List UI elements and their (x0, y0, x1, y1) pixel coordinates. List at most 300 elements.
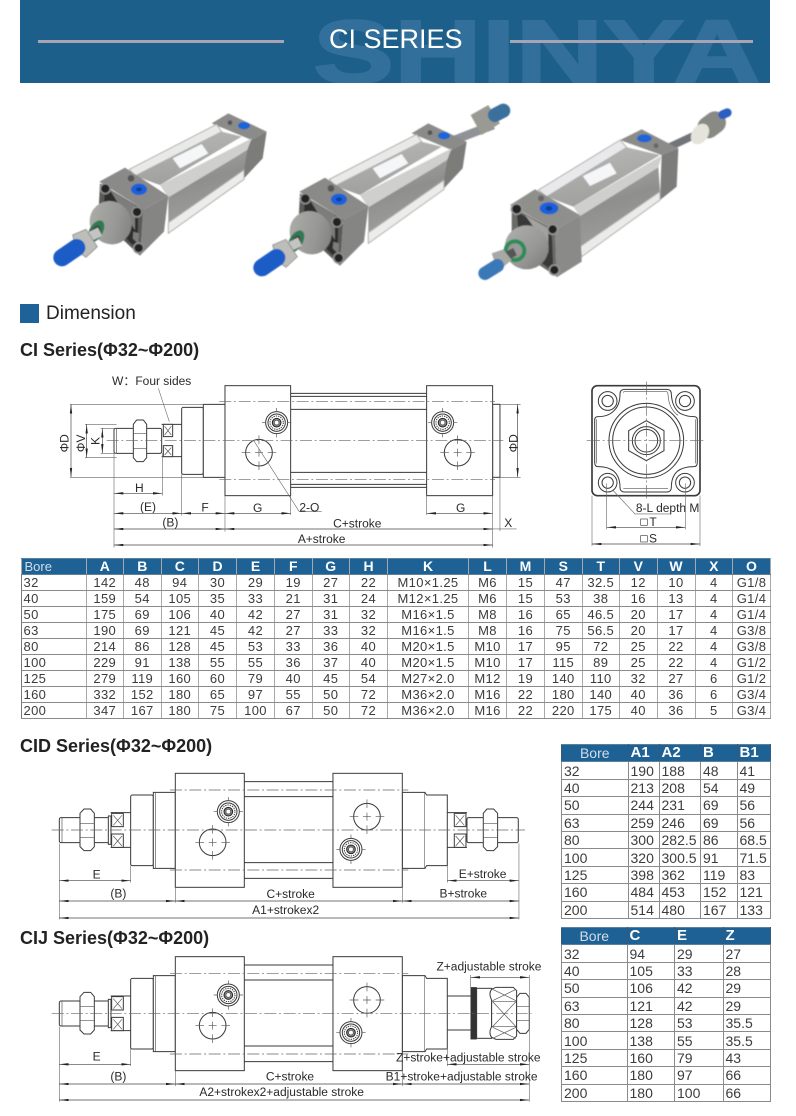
table: CIJ dimensions: 32 (564, 946, 580, 962)
extension lines (70, 404, 521, 548)
table: CIJ dimensions: E (677, 928, 687, 944)
table: CI dimensions: 55 (286, 687, 301, 702)
table: CI dimensions: 16 (518, 623, 533, 638)
table: CI dimensions: 40 (286, 671, 301, 686)
CIJ series drawing: Z+stroke+adjustable stroke (396, 1050, 541, 1064)
table: CIJ dimensions: 180 (630, 1085, 653, 1101)
table: CI dimensions: 42 (248, 607, 263, 622)
table: CI dimensions: 97 (248, 687, 263, 702)
CID series drawing: B+stroke (439, 886, 487, 900)
table: CID dimensions: 208 (662, 780, 685, 796)
CID series drawing: E (93, 867, 101, 881)
table: CID dimensions: 160 (564, 884, 587, 900)
right header rule (510, 40, 753, 43)
dimension labels: ΦD (506, 434, 520, 452)
table: CI dimensions: 119 (131, 671, 153, 686)
table: CID dimensions: 100 (564, 850, 587, 866)
table: CI dimensions: 75 (210, 703, 225, 718)
table: CID dimensions: 69 (703, 815, 719, 831)
table: CIJ dimensions: 42 (677, 980, 693, 996)
dimension labels: 2-O (299, 500, 319, 514)
table: CI dimensions: 45 (210, 623, 225, 638)
table: CI dimensions: G3/4 (737, 703, 766, 718)
table: CI dimensions: 50 (323, 687, 338, 702)
table: CI dimensions: G3/4 (737, 687, 766, 702)
dimension arrows (71, 404, 518, 545)
table: CID dimensions: 32 (564, 763, 580, 779)
table: CID dimensions: 300 (630, 832, 654, 848)
end blocks (225, 386, 493, 496)
table: CID dimensions: 152 (703, 884, 726, 900)
dimension labels: C+stroke (333, 517, 382, 531)
product photo: adjustable-stroke cylinder (485, 113, 727, 277)
table: CIJ dimensions: 40 (564, 963, 580, 979)
table: CI dimensions: 21 (286, 591, 301, 606)
table: CI dimensions: 4 (710, 575, 718, 590)
table: CI dimensions: 32.5 (587, 575, 614, 590)
table: CI dimensions: 36 (323, 639, 338, 654)
table: CID dimensions: 282.5 (662, 832, 697, 848)
table: CI dimensions: 36 (286, 655, 301, 670)
table: CI dimensions: 27 (323, 575, 338, 590)
table: CI dimensions: 31 (323, 607, 338, 622)
table: CI dimensions: 4 (710, 655, 718, 670)
table: CIJ dimensions: 125 (564, 1050, 587, 1066)
table: CI dimensions: 40 (361, 655, 376, 670)
table: CI dimensions: G3/8 (737, 623, 766, 638)
table: CIJ dimensions: 160 (630, 1050, 653, 1066)
table: CID dimensions: 362 (662, 867, 685, 883)
table: CIJ dimensions: Bore (579, 928, 609, 944)
table: CI dimensions: 33 (286, 639, 301, 654)
table: CID dimensions: 200 (564, 902, 587, 918)
table: CIJ dimensions: 128 (630, 1015, 653, 1031)
table: CI dimensions: M10 (474, 655, 501, 670)
table: CIJ dimensions: 100 (677, 1085, 700, 1101)
table: CIJ dimensions (561, 927, 771, 1102)
table: CI dimensions: 53 (556, 591, 571, 606)
table: CI dimensions: 69 (135, 623, 150, 638)
table: CID dimensions: 54 (703, 780, 719, 796)
dimension labels: G (253, 501, 262, 515)
table: CI dimensions: 27 (668, 671, 684, 686)
table: CI dimensions: 160 (168, 671, 191, 686)
table: CID dimensions: 398 (630, 867, 654, 883)
table: CIJ dimensions: 121 (630, 998, 653, 1014)
table: CI dimensions: 160 (24, 687, 46, 702)
table: CIJ dimensions: 63 (564, 998, 580, 1014)
table: CI dimensions: 16 (631, 591, 646, 606)
table: CI dimensions: M12×1.25 (398, 591, 458, 606)
table: CI dimensions: 22 (518, 703, 533, 718)
table: CI dimensions: 50 (323, 703, 338, 718)
table: CI dimensions: M36×2.0 (401, 703, 455, 718)
table: CI dimensions (21, 558, 771, 719)
table: CI dimensions: 36 (668, 687, 684, 702)
table: CI dimensions: 16 (518, 607, 533, 622)
table: CI dimensions: 35 (210, 591, 225, 606)
table: CIJ dimensions: 35.5 (726, 1033, 753, 1049)
table: CI dimensions: 180 (168, 703, 191, 718)
table: CI dimensions: 4 (710, 623, 718, 638)
table: CID dimensions: 41 (740, 763, 755, 779)
table: CI dimensions: 167 (131, 703, 154, 718)
rod end (114, 404, 500, 477)
table: CI dimensions: 22 (361, 575, 376, 590)
dimension labels: (B) (162, 516, 178, 530)
table: CI dimensions: 72 (593, 639, 608, 654)
table: CI dimensions: 69 (135, 607, 150, 622)
table: CI dimensions: G1/2 (737, 671, 766, 686)
table: CID dimensions: 56 (740, 815, 755, 831)
table: CI dimensions: 47 (556, 575, 571, 590)
table: CI dimensions: 180 (552, 687, 575, 702)
table: CIJ dimensions: 28 (726, 963, 741, 979)
table: CI dimensions: 65 (556, 607, 571, 622)
table: CIJ dimensions: 29 (677, 946, 693, 962)
table: CIJ dimensions: 50 (564, 980, 580, 996)
CI series end view: 8-L depth M (636, 501, 699, 515)
table: CI dimensions: 48 (135, 575, 150, 590)
table: CI dimensions: 24 (361, 591, 376, 606)
table: CID dimensions: 49 (740, 780, 755, 796)
table: CI dimensions: 128 (168, 639, 191, 654)
table: CI dimensions: 214 (93, 639, 116, 654)
table: CI dimensions: 25 (631, 639, 646, 654)
dimension labels: H (135, 481, 144, 495)
table: CI dimensions: 29 (248, 575, 263, 590)
table: CIJ dimensions: 105 (630, 963, 653, 979)
heading: CI Series: CI Series(Φ32~Φ200) (20, 340, 199, 360)
table: CI dimensions: 175 (589, 703, 612, 718)
table: CI dimensions: G1/4 (737, 591, 766, 606)
table: CI dimensions: M6 (478, 575, 497, 590)
table: CI dimensions: 32 (24, 575, 39, 590)
table: CI dimensions: 72 (361, 703, 376, 718)
table: CID dimensions: 125 (564, 867, 587, 883)
table: CIJ dimensions: 66 (726, 1067, 741, 1083)
table: CI dimensions: 200 (24, 703, 46, 718)
table: CIJ dimensions: 79 (677, 1050, 693, 1066)
table: CI dimensions: 22 (518, 687, 533, 702)
dimension labels: A+stroke (298, 532, 346, 546)
icon: dimension square (20, 304, 39, 323)
table: CID dimensions: 68.5 (740, 832, 767, 848)
table: CID dimensions: 71.5 (740, 850, 767, 866)
CI series main drawing (58, 374, 521, 548)
table: CI dimensions: 142 (93, 575, 116, 590)
table: CID dimensions: 167 (703, 902, 726, 918)
CIJ series drawing: C+stroke (266, 1070, 314, 1084)
table: CI dimensions: 80 (24, 639, 39, 654)
table: CID dimensions: 480 (662, 902, 685, 918)
table: CIJ dimensions: 180 (630, 1067, 653, 1083)
table: CI dimensions: 347 (93, 703, 116, 718)
table: CI dimensions: 36 (668, 703, 684, 718)
table: CI dimensions: 65 (210, 687, 225, 702)
table: CID dimensions: A2 (662, 744, 681, 761)
table: CI dimensions: M16 (474, 703, 501, 718)
table: CI dimensions: 38 (593, 591, 608, 606)
table: CI dimensions: 15 (518, 591, 533, 606)
table: CI dimensions: 12 (631, 575, 646, 590)
dimension labels: K (88, 437, 102, 445)
table: CI dimensions: M16×1.5 (401, 607, 455, 622)
table: CI dimensions: 40 (24, 591, 39, 606)
CI series end view: T (649, 515, 657, 529)
table: CID dimensions: B (703, 744, 714, 761)
table: CID dimensions: 121 (740, 884, 763, 900)
table: CI dimensions: M27×2.0 (401, 671, 455, 686)
table: CI dimensions: 110 (590, 671, 612, 686)
table: CI dimensions: 140 (552, 671, 575, 686)
table: CID dimensions: 56 (740, 797, 755, 813)
table: CI dimensions: 229 (93, 655, 116, 670)
leaders (158, 388, 322, 512)
table: CI dimensions: 115 (552, 655, 574, 670)
title: CI SERIES (329, 24, 463, 54)
table: CIJ dimensions: 94 (630, 946, 645, 962)
table: CI dimensions: G1/4 (737, 607, 766, 622)
table: CI dimensions: M8 (478, 607, 497, 622)
table: CI dimensions: 54 (135, 591, 150, 606)
table: CI dimensions: 17 (518, 655, 533, 670)
table: CI dimensions: 100 (24, 655, 46, 670)
table: CID dimensions: 231 (662, 797, 685, 813)
left header rule (38, 40, 284, 43)
table: CID dimensions: 83 (740, 867, 755, 883)
table: CI dimensions: 40 (210, 607, 225, 622)
table: CI dimensions: 159 (93, 591, 116, 606)
table: CIJ dimensions: 33 (677, 963, 693, 979)
table: CID dimensions: 453 (662, 884, 685, 900)
table: CI dimensions: 32 (361, 623, 376, 638)
table: CI dimensions: 94 (172, 575, 187, 590)
table: CID dimensions: 50 (564, 797, 580, 813)
table: CID dimensions: 213 (630, 780, 654, 796)
heading: CID Series: CID Series(Φ32~Φ200) (20, 736, 212, 756)
dimension labels: (E) (140, 500, 156, 514)
table: CI dimensions: 175 (93, 607, 116, 622)
table: CIJ dimensions: 55 (677, 1033, 693, 1049)
table: CI dimensions: 55 (248, 655, 263, 670)
table: CI dimensions: 190 (93, 623, 116, 638)
table: CID dimensions: A1 (630, 744, 650, 761)
table: CI dimensions: 40 (631, 703, 646, 718)
table: CI dimensions: 50 (24, 607, 39, 622)
table: CIJ dimensions: 27 (726, 946, 741, 962)
table: CID dimensions: 133 (740, 902, 763, 918)
table: CI dimensions: 27 (286, 623, 301, 638)
table: CID dimensions: 259 (630, 815, 654, 831)
table: CI dimensions: M16×1.5 (401, 623, 455, 638)
table: CID dimensions: 246 (662, 815, 685, 831)
table: CID dimensions: 320 (630, 850, 654, 866)
CI series end view: S (649, 532, 657, 546)
table: CI dimensions: 75 (556, 623, 571, 638)
table: CI dimensions: 46.5 (587, 607, 614, 622)
table: CIJ dimensions: 53 (677, 1015, 693, 1031)
product photo: standard cylinder (62, 113, 267, 258)
table: CID dimensions: 300.5 (662, 850, 697, 866)
table: CI dimensions: 4 (710, 591, 718, 606)
table: CID dimensions: 86 (703, 832, 719, 848)
table: CI dimensions: 15 (518, 575, 533, 590)
table: CID dimensions: B1 (740, 744, 759, 761)
table: CI dimensions: M16 (474, 687, 501, 702)
table: CI dimensions: 10 (668, 575, 684, 590)
table: CIJ dimensions: 43 (726, 1050, 741, 1066)
table: CI dimensions: M20×1.5 (401, 655, 455, 670)
table: CI dimensions: 125 (24, 671, 46, 686)
table: CID dimensions: 80 (564, 832, 580, 848)
table: CI dimensions: 220 (552, 703, 575, 718)
table: CI dimensions: M12 (474, 671, 501, 686)
table: CI dimensions: 32 (361, 607, 376, 622)
table: CI dimensions: 55 (210, 655, 225, 670)
table: CID dimensions: 514 (630, 902, 654, 918)
table: CID dimensions (561, 744, 771, 919)
table: CI dimensions: 105 (168, 591, 191, 606)
CIJ series drawing (52, 957, 542, 1102)
table: CI dimensions: 17 (668, 623, 684, 638)
table: CID dimensions: 119 (703, 867, 725, 883)
dimension labels: F (201, 500, 209, 514)
table: CI dimensions: M20×1.5 (401, 639, 455, 654)
table: CI dimensions: 22 (668, 655, 684, 670)
CIJ series drawing: (B) (110, 1070, 126, 1084)
table: CI dimensions: 33 (323, 623, 338, 638)
header banner (20, 0, 770, 83)
table: CI dimensions: 31 (323, 591, 338, 606)
table: CI dimensions: 63 (24, 623, 39, 638)
table: CI dimensions: 100 (244, 703, 267, 718)
table: CI dimensions: 25 (631, 655, 646, 670)
table: CI dimensions: 19 (518, 671, 533, 686)
table: CI dimensions: M8 (478, 623, 497, 638)
CID series drawing: C+stroke (266, 887, 315, 901)
table: CI dimensions: 140 (589, 687, 612, 702)
table: CID dimensions: 190 (630, 763, 654, 779)
table: CI dimensions: 27 (286, 607, 301, 622)
CIJ series drawing: E (93, 1050, 101, 1064)
table: CIJ dimensions: 200 (564, 1085, 587, 1101)
table: CI dimensions: 79 (248, 671, 263, 686)
table: CI dimensions: 30 (210, 575, 225, 590)
table: CIJ dimensions: C (630, 928, 640, 944)
table: CID dimensions: 40 (564, 780, 580, 796)
table: CIJ dimensions: 42 (677, 998, 693, 1014)
dimension labels: X (504, 516, 512, 530)
CI series end view (587, 382, 705, 546)
table: CI dimensions: G1/2 (737, 655, 766, 670)
CID series drawing: (B) (110, 886, 126, 900)
table: CI dimensions: 4 (710, 639, 718, 654)
table: CID dimensions: 69 (703, 797, 719, 813)
table: CIJ dimensions: 138 (630, 1033, 653, 1049)
table: CI dimensions: 279 (93, 671, 116, 686)
table: CI dimensions: 22 (668, 639, 684, 654)
table: CI dimensions: 6 (710, 687, 718, 702)
table: CI dimensions: 32 (631, 671, 646, 686)
table: CI dimensions: 89 (593, 655, 608, 670)
table: CIJ dimensions: 106 (630, 980, 653, 996)
table: CIJ dimensions: Z (726, 928, 735, 944)
table: CI dimensions: 54 (361, 671, 376, 686)
table: CI dimensions: 95 (556, 639, 571, 654)
table: CI dimensions: 17 (668, 607, 684, 622)
table: CIJ dimensions: 80 (564, 1015, 580, 1031)
table: CIJ dimensions: 97 (677, 1067, 693, 1083)
dimension labels: W：Four sides (112, 374, 191, 388)
dimension labels: G (456, 501, 465, 515)
table: CI dimensions: M10×1.25 (398, 575, 458, 590)
table: CI dimensions: 138 (168, 655, 191, 670)
table: CI dimensions: 106 (168, 607, 191, 622)
CIJ series drawing: B1+stroke+adjustable stroke (386, 1070, 538, 1084)
table: CI dimensions: 4 (710, 607, 718, 622)
table: CI dimensions: 20 (631, 607, 646, 622)
table: CIJ dimensions: 29 (726, 980, 741, 996)
CIJ series drawing: Z+adjustable stroke (436, 960, 542, 974)
CID series drawing: A1+strokex2 (252, 903, 319, 917)
table: CI dimensions: M6 (478, 591, 497, 606)
table: CI dimensions: G1/8 (737, 575, 766, 590)
table: CID dimensions: 484 (630, 884, 654, 900)
heading: CIJ Series: CIJ Series(Φ32~Φ200) (20, 928, 209, 948)
table: CI dimensions: 37 (323, 655, 338, 670)
table: CI dimensions: 40 (361, 639, 376, 654)
CIJ series drawing: A2+strokex2+adjustable stroke (199, 1085, 364, 1099)
table: CID dimensions: 48 (703, 763, 719, 779)
dimension labels: ΦD (58, 434, 72, 452)
table: CI dimensions: 60 (210, 671, 225, 686)
dimension labels (58, 374, 520, 546)
adjustable stroke assembly (447, 987, 529, 1039)
table: CID dimensions: 188 (662, 763, 685, 779)
table: CI dimensions: 45 (323, 671, 338, 686)
table: CI dimensions: 332 (93, 687, 116, 702)
table: CI dimensions: M10 (474, 639, 501, 654)
product photo: double-rod cylinder (262, 105, 503, 268)
table: CI dimensions: 67 (286, 703, 301, 718)
table: CI dimensions: 56.5 (587, 623, 614, 638)
table: CIJ dimensions: 160 (564, 1067, 587, 1083)
table: CI dimensions: 91 (135, 655, 150, 670)
table: CID dimensions: 244 (630, 797, 654, 813)
CID series drawing (52, 773, 525, 919)
table: CI dimensions: 121 (168, 623, 191, 638)
table: CI dimensions: 19 (286, 575, 301, 590)
table: CI dimensions: Bore (24, 559, 52, 574)
table: CI dimensions: 152 (131, 687, 154, 702)
table: CI dimensions: M36×2.0 (401, 687, 455, 702)
table: CI dimensions: 6 (710, 671, 718, 686)
table: CID dimensions: Bore (580, 745, 610, 761)
table: CID dimensions: 63 (564, 815, 580, 831)
table: CIJ dimensions: 29 (726, 998, 741, 1014)
table: CI dimensions: 72 (361, 687, 376, 702)
tie rods (291, 393, 427, 487)
table: CI dimensions: 5 (710, 703, 718, 718)
table: CIJ dimensions: 100 (564, 1033, 587, 1049)
table: CI dimensions: 45 (210, 639, 225, 654)
table: CI dimensions: G3/8 (737, 639, 766, 654)
table: CI dimensions: 42 (248, 623, 263, 638)
table: CI dimensions: 20 (631, 623, 646, 638)
table: CI dimensions: 180 (168, 687, 191, 702)
table: CI dimensions: 13 (668, 591, 684, 606)
